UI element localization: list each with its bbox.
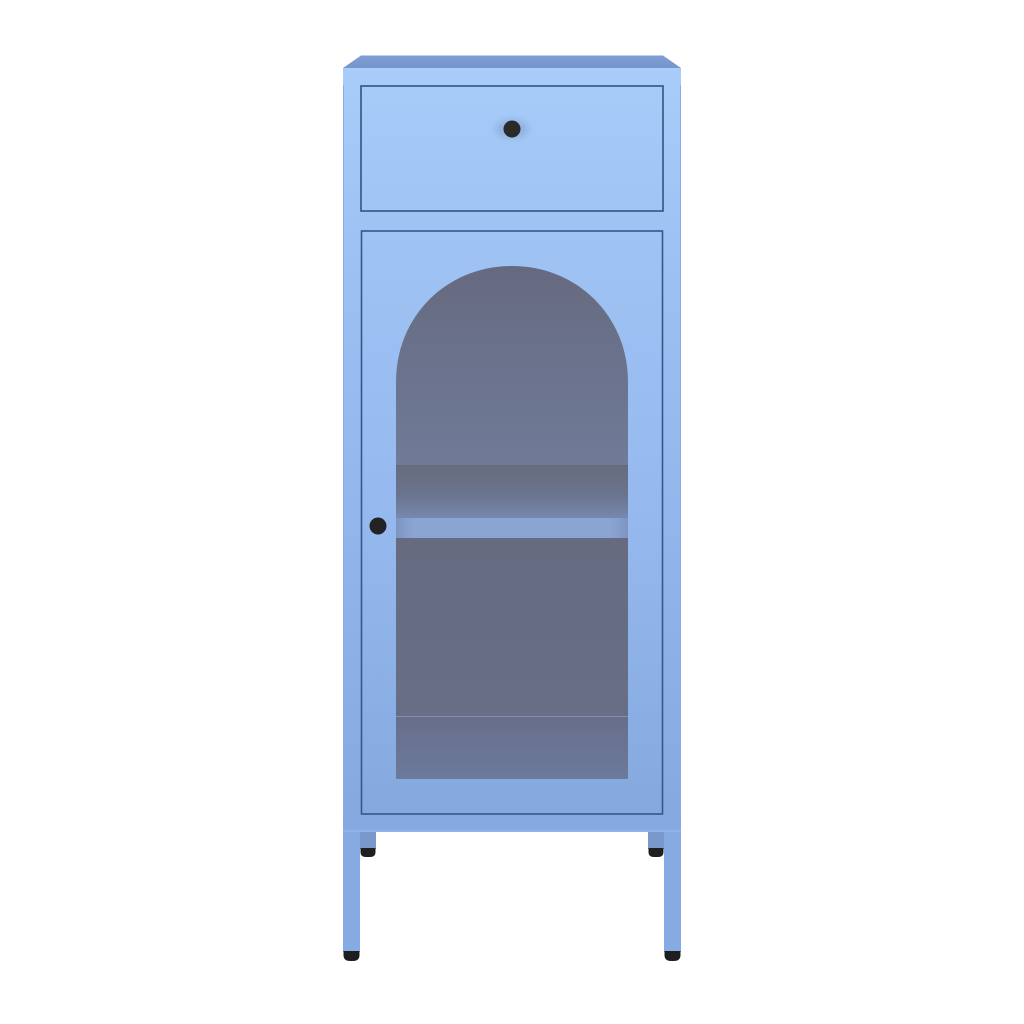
lower interior: [396, 538, 628, 716]
drawer knob: [504, 120, 520, 138]
glass door: [362, 231, 662, 814]
drawer: [361, 86, 663, 211]
front left foot: [344, 951, 360, 961]
cabinet body: [343, 68, 681, 832]
front legs: [343, 832, 681, 961]
front right foot: [664, 951, 680, 961]
back legs: [360, 832, 664, 857]
back left foot: [360, 848, 376, 857]
door knob: [370, 518, 386, 534]
illustration: blue cabinet: [343, 56, 681, 961]
cabinet top face: [343, 56, 681, 68]
drawer knob shadow: [496, 120, 528, 138]
cabinet floor: [396, 716, 628, 779]
shelf: [396, 518, 628, 538]
side frame shading: [343, 85, 681, 832]
upper interior: [396, 465, 628, 518]
back right foot: [648, 848, 664, 857]
arched glass window: [396, 266, 628, 779]
